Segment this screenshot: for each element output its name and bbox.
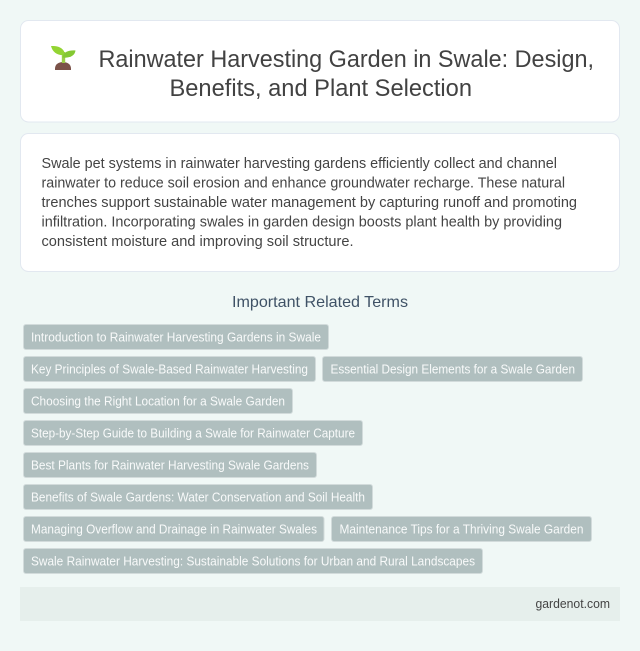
- tag: benefits: [24, 484, 372, 510]
- footer: [20, 587, 620, 621]
- footer text: gardenot.com: [536, 597, 610, 611]
- tag: key principles: Key Principles of Swale-Based Rainwater Harvesting: [31, 362, 308, 376]
- icon: seedling: [51, 46, 76, 70]
- tag: choosing location: Choosing the Right Location for a Swale Garden: [31, 394, 285, 408]
- tag: step by step: Step-by-Step Guide to Building a Swale for Rainwater Capture: [31, 426, 355, 440]
- tag: sustainable solutions: [24, 548, 482, 574]
- title: Benefits, and Plant Selection: [170, 75, 472, 102]
- text block: description: [42, 156, 577, 250]
- text block: description: infiltration. Incorporating swales in garden design boosts plant health by providing: [42, 214, 562, 230]
- text block: description: rainwater to reduce soil erosion and enhance groundwater recharge. These natural: [42, 176, 565, 192]
- tag: benefits: Benefits of Swale Gardens: Water Conservation and Soil Health: [31, 490, 365, 504]
- tag: essential design: Essential Design Elements for a Swale Garden: [330, 362, 575, 376]
- heading: important related terms: Important Related Terms: [232, 294, 408, 311]
- tag: introduction: [24, 324, 328, 350]
- tag: maintenance: Maintenance Tips for a Thriving Swale Garden: [340, 522, 584, 536]
- tag: maintenance: [332, 516, 592, 542]
- tag list: [24, 324, 592, 574]
- title: [98, 46, 594, 102]
- text block: description: consistent moisture and improving soil structure.: [42, 234, 354, 250]
- text block: description: trenches support sustainable water management by capturing runoff and promoting: [42, 195, 577, 211]
- title: Rainwater Harvesting Garden in Swale: Design,: [98, 46, 594, 73]
- tag: introduction: Introduction to Rainwater Harvesting Gardens in Swale: [31, 330, 321, 344]
- panel: title card: [20, 20, 620, 122]
- tag: sustainable solutions: Swale Rainwater Harvesting: Sustainable Solutions for Urban and Rural Landscapes: [31, 554, 475, 568]
- tag: step by step: [24, 420, 362, 446]
- tag: essential design: [322, 356, 582, 382]
- tag: managing overflow: [24, 516, 324, 542]
- tag: managing overflow: Managing Overflow and Drainage in Rainwater Swales: [31, 522, 317, 536]
- tag: best plants: [24, 452, 316, 478]
- tag: choosing location: [24, 388, 292, 414]
- panel: description card: [20, 134, 620, 272]
- tag: key principles: [24, 356, 316, 382]
- text block: description: Swale pet systems in rainwater harvesting gardens efficiently collect and channel: [42, 156, 557, 172]
- tag: best plants: Best Plants for Rainwater Harvesting Swale Gardens: [31, 458, 309, 472]
